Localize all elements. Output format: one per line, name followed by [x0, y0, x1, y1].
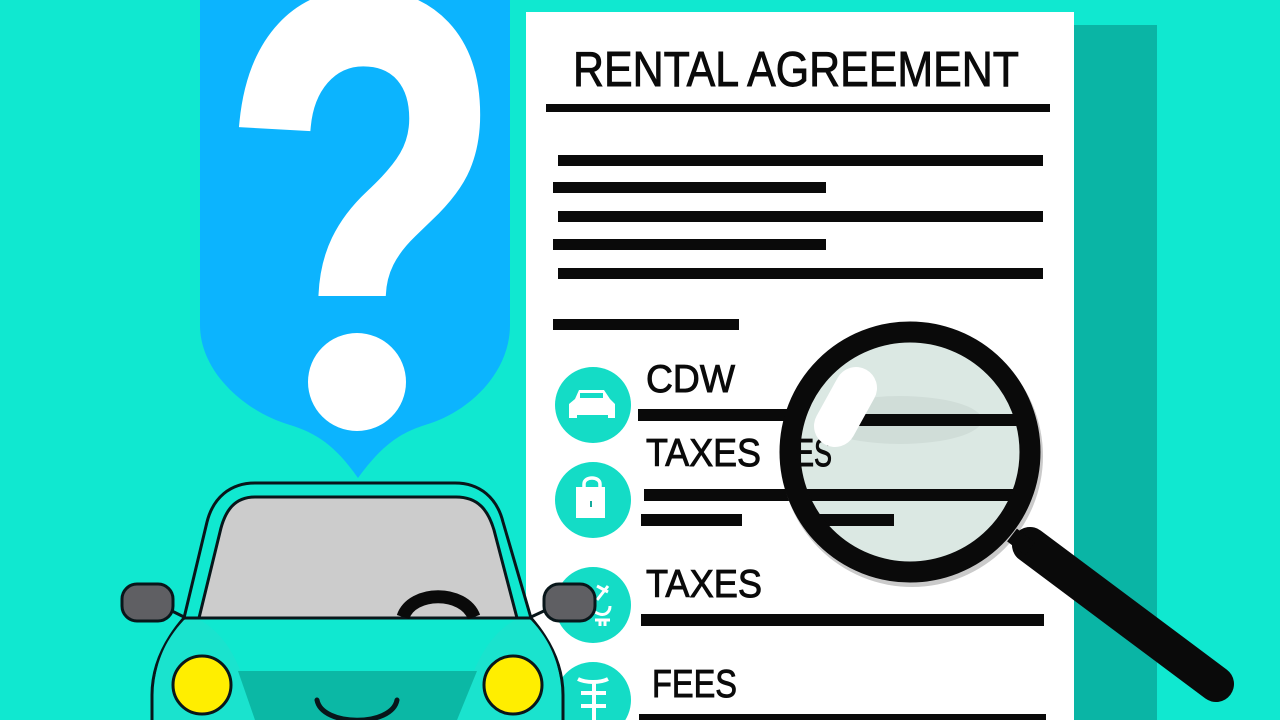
windshield [199, 497, 517, 618]
icon: car front [122, 483, 595, 720]
car side shading [154, 620, 561, 720]
lens glass [800, 342, 1020, 562]
steering wheel [403, 597, 474, 617]
icon: engine badge [555, 567, 631, 643]
icon: car badge [555, 367, 631, 443]
panel: rental agreement document [526, 12, 1074, 720]
right mirror [531, 584, 595, 621]
label: TAXES: TAXES [646, 432, 761, 475]
body text lines [553, 155, 1043, 330]
title: RENTAL AGREEMENT [573, 43, 1019, 97]
second TAXES rule [641, 614, 1044, 626]
handle [1030, 545, 1216, 684]
car roof [184, 483, 531, 618]
panel: document shadow [1074, 25, 1157, 720]
lens highlight [835, 388, 856, 426]
lens ring [790, 332, 1030, 572]
car body [152, 618, 563, 720]
lens glass: ES [796, 432, 832, 475]
panel: question shield [200, 0, 510, 478]
TAXES rules [641, 489, 1030, 526]
FEES rule [639, 714, 1046, 720]
icon: axle badge [555, 662, 631, 720]
CDW rule [638, 409, 803, 421]
icon: padlock badge [555, 462, 631, 538]
left headlight [173, 656, 231, 714]
icon: question mark [238, 0, 480, 431]
label: CDW: CDW [646, 358, 735, 401]
title rule [546, 104, 1050, 112]
icon: magnifying glass [780, 320, 1216, 684]
car hood [238, 671, 477, 720]
grille smile [317, 700, 397, 720]
label: FEES: FEES [652, 663, 737, 706]
left mirror [122, 584, 184, 621]
label: TAXES second: TAXES [646, 563, 762, 606]
right headlight [484, 656, 542, 714]
